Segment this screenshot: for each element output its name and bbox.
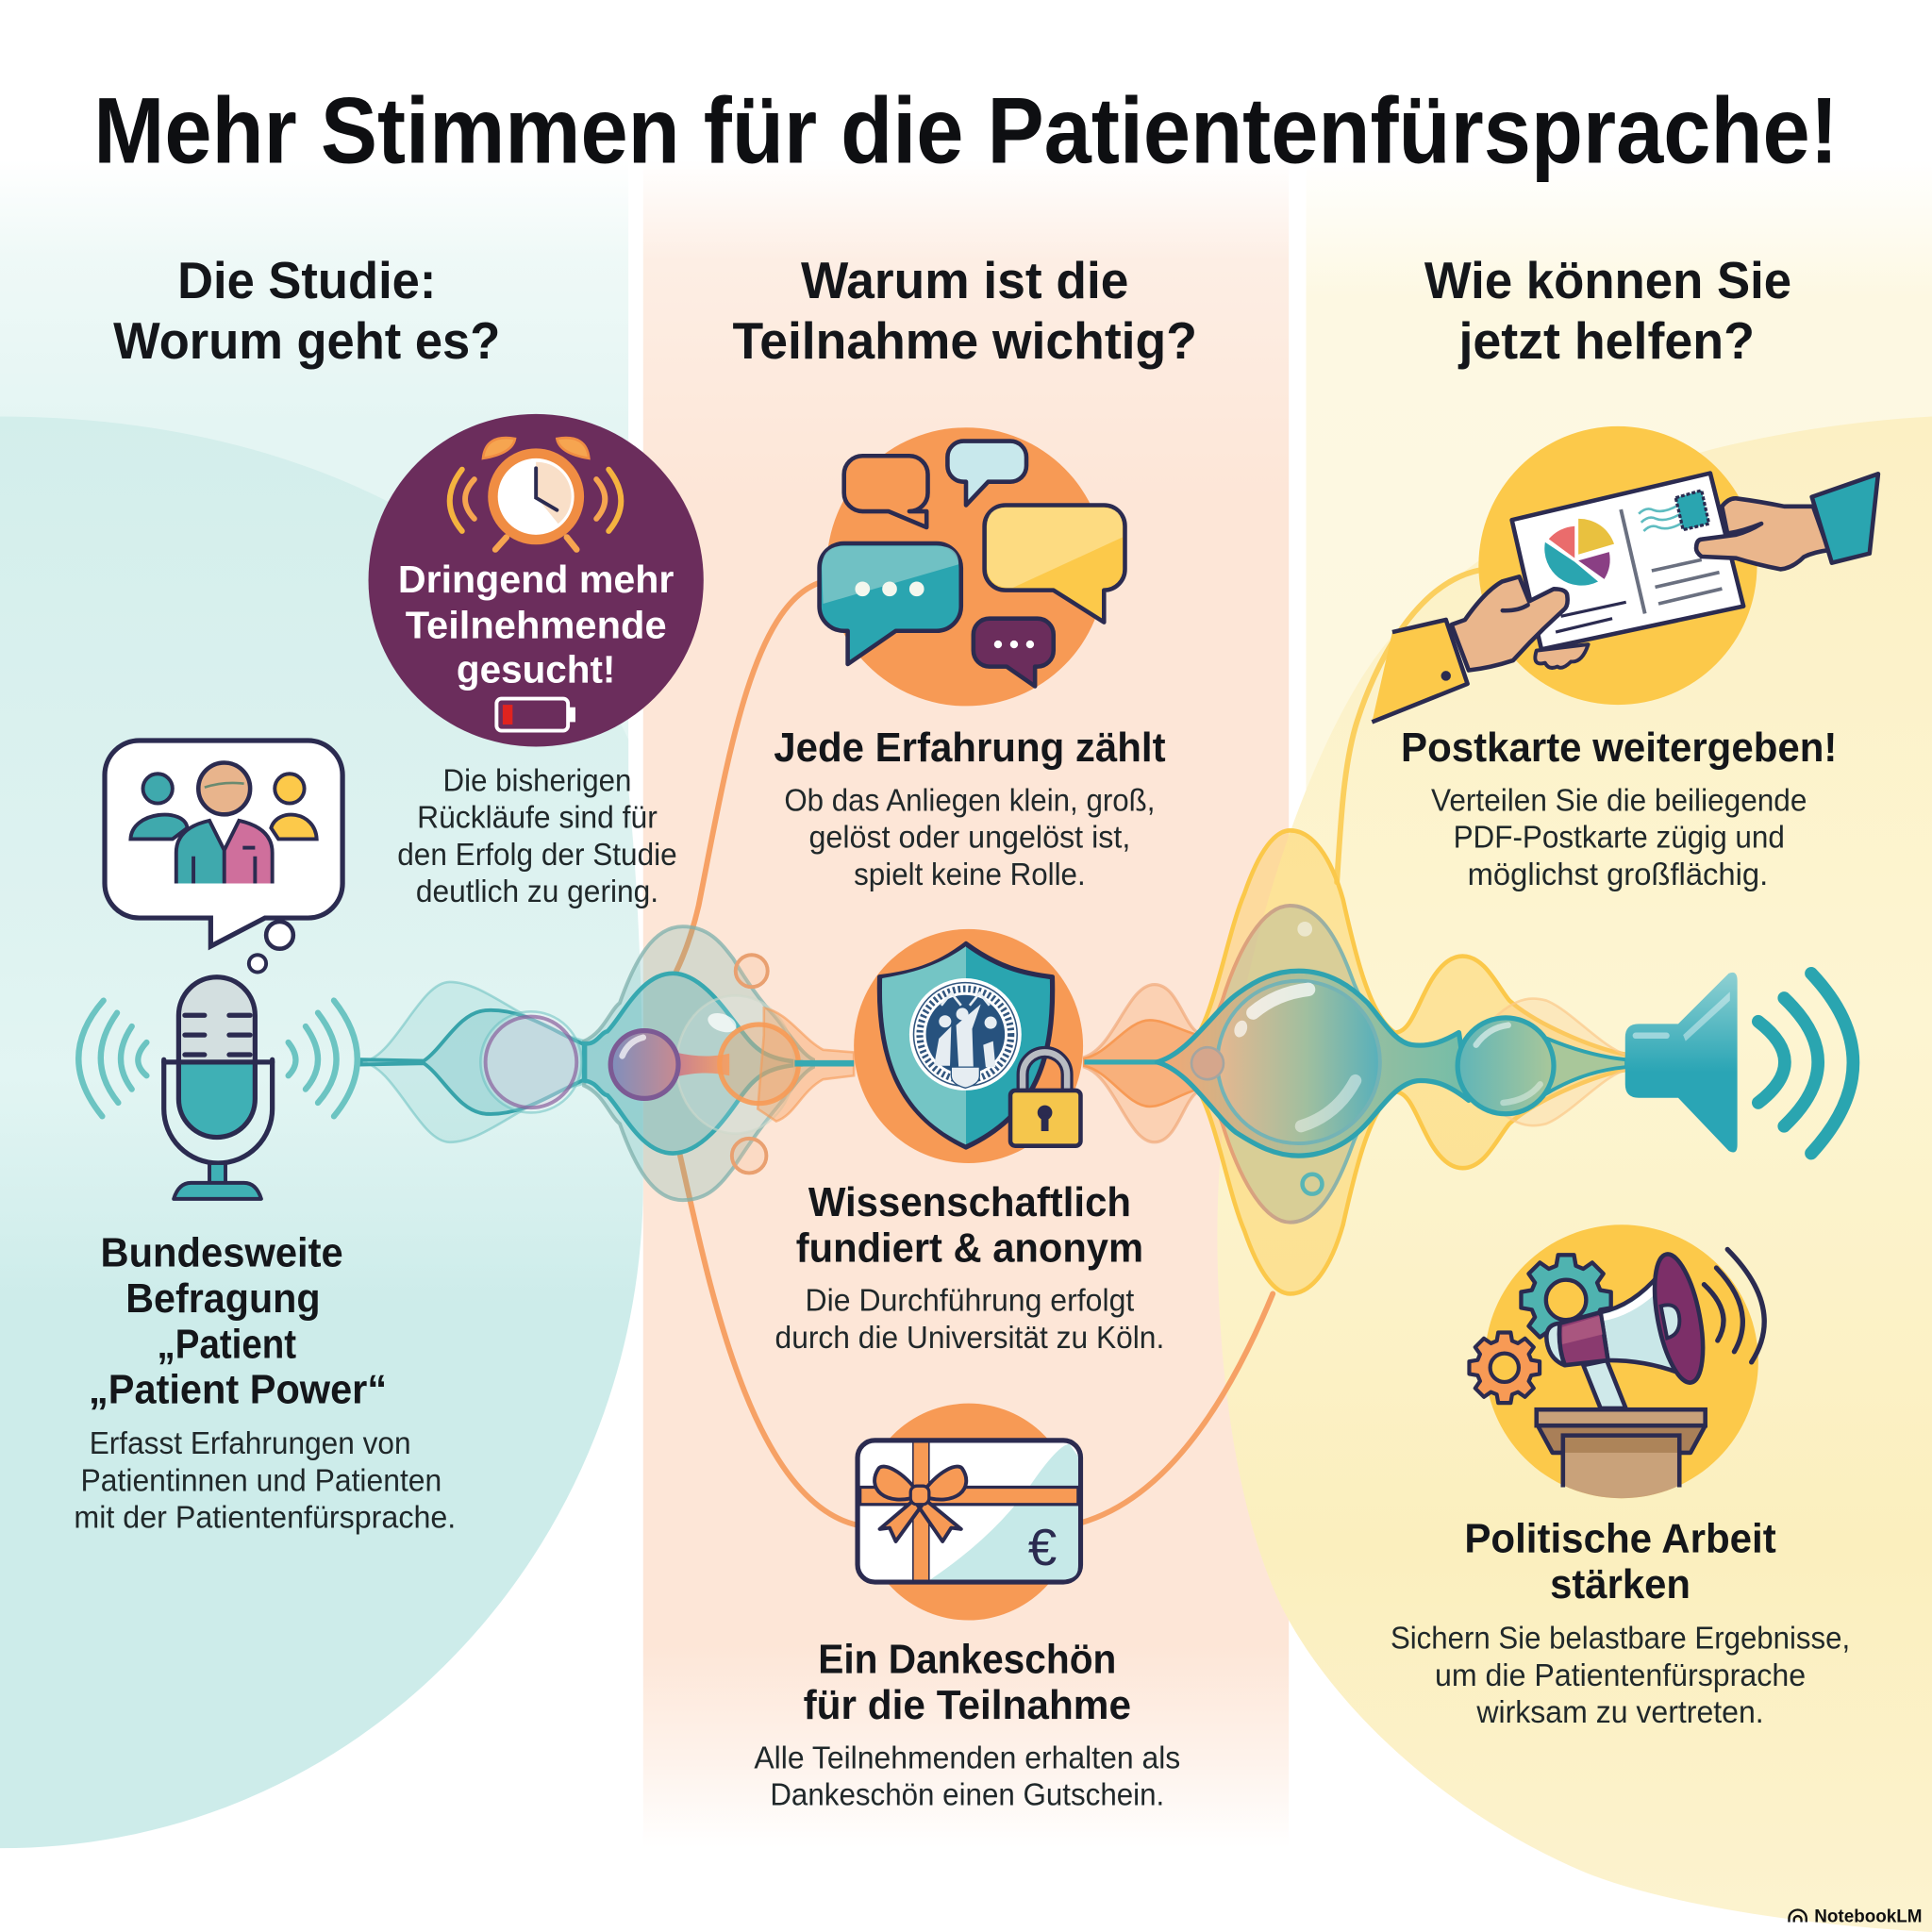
center person [198,762,250,814]
badge: Dringend mehr Teilnehmende gesucht [369,414,704,747]
text: Bundesweite Befragung: mit der Patientenfürsprache. [74,1501,456,1536]
teal gear [1521,1255,1611,1345]
badge: Dringend mehr Teilnehmende gesucht: Teilnehmende [406,604,667,647]
heading: Die Studie: Die Studie: [177,251,436,309]
icon: megaphone on podium [1469,1224,1764,1503]
text: Jede Erfahrung zählt: spielt keine Rolle. [854,858,1086,892]
text: Bundesweite Befragung: „Patient [158,1322,296,1367]
icon: loudspeaker [1625,973,1853,1154]
text: Politische Arbeit stärken: Politische Arbeit [1464,1517,1776,1562]
heading: Wie können Sie jetzt helfen: Wie können Sie [1424,251,1791,309]
text: Rückläufe: Die bisherigen [443,764,631,799]
heading: Warum ist die Teilnahme wichtig [732,251,1197,370]
mouth [1646,1250,1712,1387]
text: Bundesweite Befragung: Bundesweite [100,1231,343,1276]
icon: alarm clock [450,438,621,550]
text: Politische Arbeit stärken [1391,1517,1850,1730]
right hand and sleeve [1696,498,1828,569]
icon: chat bubbles [820,427,1124,706]
purple band [1559,1312,1607,1365]
icon: gift card: € [1028,1518,1057,1576]
text: Ein Dankeschön [754,1638,1180,1812]
text: Jede Erfahrung zählt: gelöst oder ungelöst ist, [808,821,1130,856]
watermark: NotebookLM: NotebookLM [1814,1907,1923,1927]
left person [143,774,173,804]
back cap [1546,1324,1565,1365]
heading: Warum ist die Teilnahme wichtig: Warum ist die [801,251,1128,309]
text: Wissenschaftlich fundiert: Die Durchführung erfolgt [806,1284,1134,1319]
text: Bundesweite Befragung [74,1231,456,1536]
connector lines [676,569,1485,1525]
university seal [909,978,1022,1091]
lower fingers [1535,644,1589,668]
text: Wissenschaftlich fundiert: durch die Universität zu Köln. [775,1321,1164,1356]
text: Postkarte weitergeben: Postkarte weitergeben! [1401,725,1837,771]
handle [1583,1360,1625,1408]
cone [1601,1274,1678,1373]
text: Postkarte weitergeben: möglichst großflächig. [1468,858,1768,892]
icon: microphone [78,977,358,1199]
text: Bundesweite Befragung: Patientinnen und Patienten [81,1463,441,1498]
text: Bundesweite Befragung: „Patient Power“ [89,1368,387,1413]
left hand and sleeve [1452,576,1568,671]
stand [209,1163,225,1185]
text: Rückläufe [397,764,677,909]
text: Rückläufe: den Erfolg der Studie [397,838,677,873]
heading: Wie können Sie jetzt helfen [1424,251,1791,370]
heading: Wie können Sie jetzt helfen: jetzt helfen? [1457,311,1755,370]
right person [275,774,305,804]
text: Postkarte weitergeben: Verteilen Sie die beiliegende [1431,783,1807,818]
text: Politische Arbeit stärken: um die Patientenfürsprache [1435,1658,1806,1693]
icon: low battery [496,699,575,731]
card [1512,474,1743,649]
text: Wissenschaftlich fundiert: Wissenschaftlich [808,1180,1131,1225]
sound arcs [1704,1249,1764,1362]
text: Jede Erfahrung zählt [774,725,1166,892]
orange gear [1469,1332,1540,1403]
icon: speech bubble with people [105,741,342,973]
icon: shield with seal and lock [854,929,1083,1163]
text: Ein Dankeschön: Ein Dankeschön [818,1638,1116,1683]
sound arcs [78,1001,358,1116]
waveform: left section [361,926,854,1200]
text: Wissenschaftlich fundiert: fundiert & anonym [796,1225,1143,1271]
podium [1538,1425,1706,1453]
heading: Die Studie: Worum geht es? [113,311,500,370]
text: Ein Dankeschön: Dankeschön einen Gutschein. [770,1777,1164,1812]
bubbles [480,1011,581,1112]
pie chart [1544,519,1614,586]
capsule [178,978,255,1062]
heading: Warum ist die Teilnahme wichtig: Teilnahme wichtig? [732,311,1197,370]
padlock [1023,1052,1067,1091]
text: Ein Dankeschön: Alle Teilnehmenden erhalten als [754,1740,1180,1775]
text: Bundesweite Befragung: Befragung [125,1276,321,1322]
text: Politische Arbeit stärken: stärken [1550,1562,1690,1607]
text: Jede Erfahrung zählt: Jede Erfahrung zählt [774,725,1166,771]
text: Bundesweite Befragung: Erfasst Erfahrungen von [90,1426,411,1461]
text: Rückläufe: Rückläufe sind für [417,801,658,836]
text: Ein Dankeschön: für die Teilnahme [804,1683,1131,1728]
badge: Dringend mehr Teilnehmende gesucht: gesucht! [457,648,615,691]
text: Politische Arbeit stärken: Sichern Sie belastbare Ergebnisse, [1391,1622,1850,1657]
text: Rückläufe: deutlich zu gering. [416,874,658,909]
bow [874,1467,966,1541]
badge: Dringend mehr Teilnehmende gesucht: Dringend mehr [398,558,675,601]
icon: postcard handover [1372,426,1878,722]
text: Postkarte weitergeben: PDF-Postkarte zügig und [1454,821,1785,856]
waveform: right section [1084,830,1626,1293]
icon: gift card [858,1404,1080,1621]
heading: Die Studie [113,251,500,370]
text: Jede Erfahrung zählt: Ob das Anliegen klein, groß, [784,783,1155,818]
text: Postkarte weitergeben [1401,725,1837,892]
text: Wissenschaftlich fundiert [775,1180,1164,1356]
text: Politische Arbeit stärken: wirksam zu vertreten. [1475,1695,1764,1730]
